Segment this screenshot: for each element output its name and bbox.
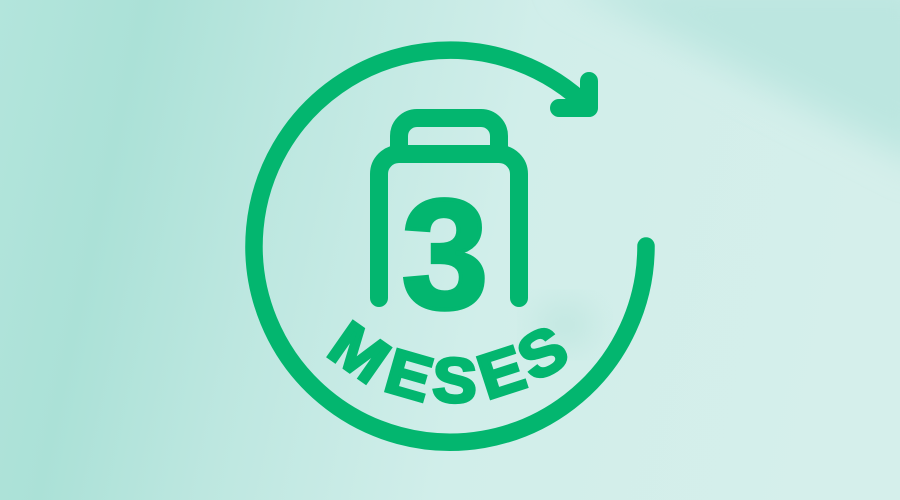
icon: three months cycle <box>254 50 646 442</box>
label: MESES: S <box>431 344 478 416</box>
label: MESES <box>317 308 579 416</box>
icon: bottle <box>379 118 519 298</box>
label: MESES: S <box>506 311 579 395</box>
arrow head <box>559 81 589 108</box>
label: MESES: E <box>469 332 533 413</box>
circular arrow ring <box>254 50 646 442</box>
label: MESES: M <box>317 308 402 397</box>
label: MESES: E <box>378 335 440 415</box>
number 3: 3 <box>402 168 488 342</box>
